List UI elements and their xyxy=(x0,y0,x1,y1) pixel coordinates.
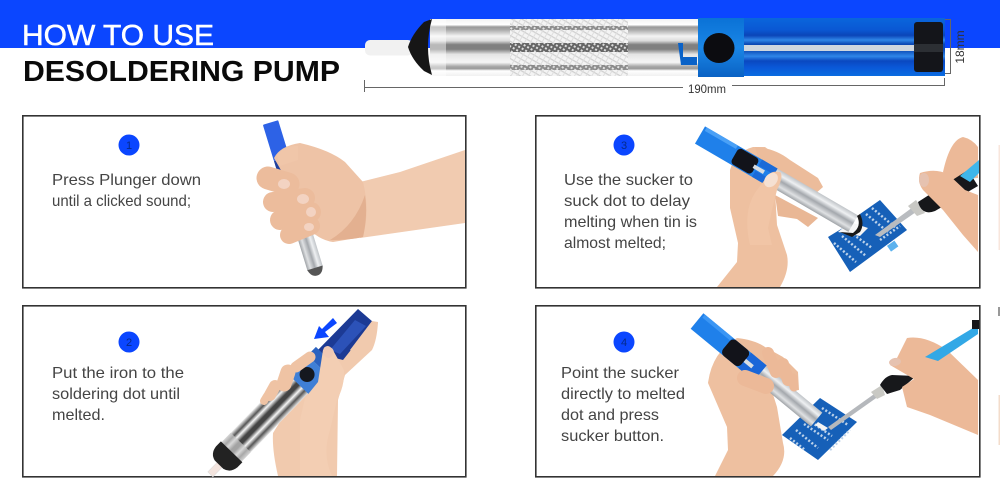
step 4 text: sucker button. xyxy=(561,428,664,445)
dimension: 18mm xyxy=(945,20,967,74)
step 1 badge: 1 xyxy=(126,140,132,152)
step 4 text: dot and press xyxy=(561,407,659,424)
arrow: press down xyxy=(314,318,337,339)
step 3 badge xyxy=(614,134,634,156)
step 4 text: directly to melted xyxy=(561,386,685,403)
step 2 text: Put the iron to the xyxy=(52,365,184,382)
step 4 badge xyxy=(614,332,634,352)
header band xyxy=(0,0,1000,48)
title: HOW TO USE xyxy=(22,20,214,52)
step 3 text: melting when tin is xyxy=(564,214,697,231)
step 3 text: suck dot to delay xyxy=(564,193,690,210)
step 4 text: Point the sucker xyxy=(561,365,680,382)
step 1 badge xyxy=(118,134,140,156)
panel: step 4 xyxy=(536,306,980,477)
panel: step 3 xyxy=(536,116,980,288)
step 2 text: soldering dot until xyxy=(52,386,180,403)
step 4 photo: hands, pump, iron and circuit board xyxy=(691,313,979,476)
product image: desoldering pump xyxy=(365,18,945,77)
step 2 badge: 2 xyxy=(126,337,132,349)
panel: step 1 xyxy=(23,116,466,288)
dimension: 18mm: 18mm xyxy=(953,30,967,64)
dimension: 190mm xyxy=(364,78,944,96)
step 1 text: until a clicked sound; xyxy=(52,193,191,210)
dimension: 190mm: 190mm xyxy=(688,82,726,96)
title xyxy=(22,20,340,88)
step 3 photo: hands, pump, iron and circuit board xyxy=(695,126,979,287)
adjacent image slivers at right edge xyxy=(998,145,1000,445)
title: DESOLDERING PUMP xyxy=(23,56,340,88)
step 2 badge xyxy=(118,332,140,352)
step 1 photo: hand gripping pump xyxy=(263,120,465,278)
step 1 text: Press Plunger down xyxy=(52,172,201,189)
step 3 badge: 3 xyxy=(621,140,627,152)
step 2 photo: hand pressing plunger xyxy=(199,309,378,484)
step 4 badge: 4 xyxy=(621,337,627,349)
step 2 text: melted. xyxy=(52,407,105,424)
step 3 text: Use the sucker to xyxy=(564,172,693,189)
step 3 text: almost melted; xyxy=(564,235,666,252)
panel: step 2 xyxy=(23,306,466,484)
